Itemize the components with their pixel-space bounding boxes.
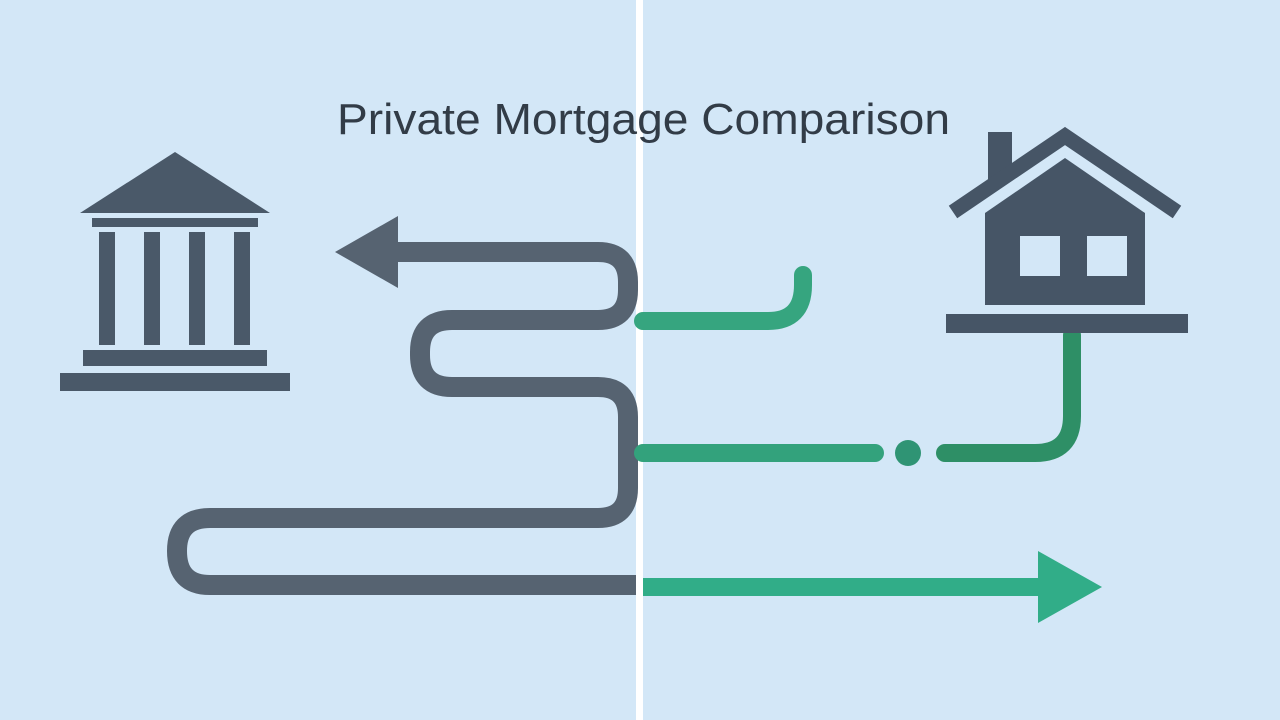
title: Private Mortgage Comparison [337, 95, 950, 144]
arrow: green short curve [643, 275, 803, 321]
divider [636, 0, 643, 720]
icon: bank [60, 152, 290, 391]
arrow: green dotted path to house [643, 335, 1072, 466]
arrow: winding gray path [177, 216, 636, 585]
arrow: green straight [643, 551, 1102, 623]
icon: house [946, 132, 1188, 333]
